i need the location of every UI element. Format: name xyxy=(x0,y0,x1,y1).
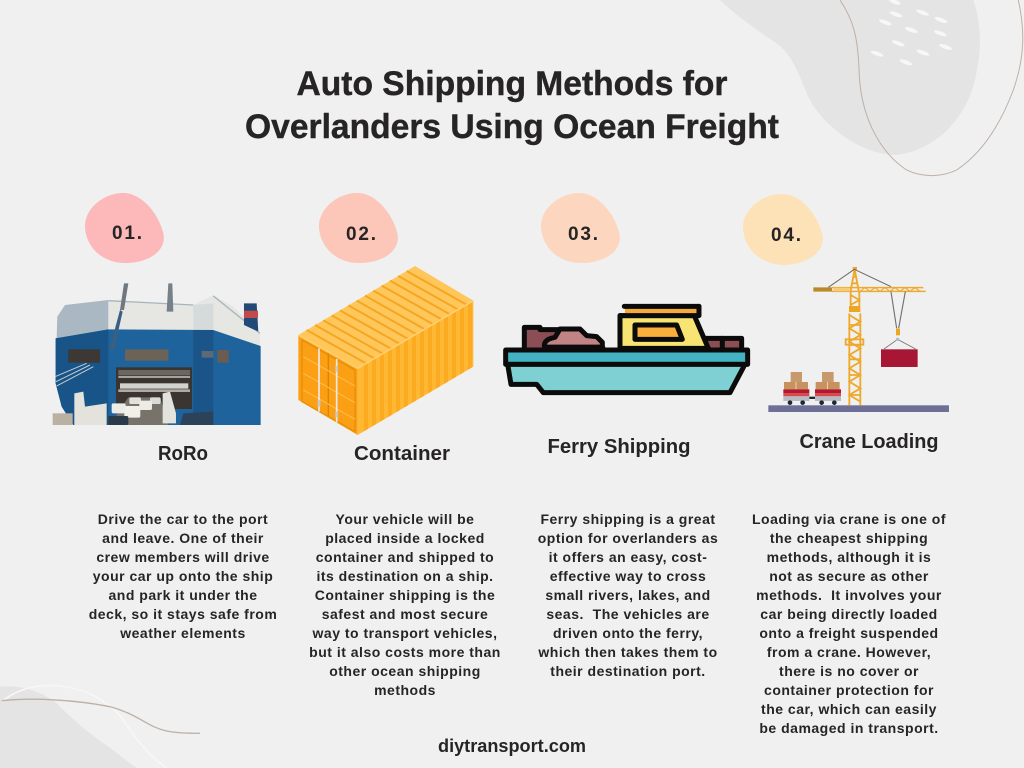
crane tower xyxy=(846,269,863,405)
number badge 01: 01. xyxy=(112,223,142,244)
ground xyxy=(768,405,949,412)
text block: Crane description: not as secure as other xyxy=(769,568,929,584)
number badge 04: 04. xyxy=(771,225,801,246)
title: Overlanders Using Ocean Freight xyxy=(245,108,779,146)
text block: Crane description: the car, which can easily xyxy=(761,701,937,717)
text block: Ferry description: it offers an easy, cost- xyxy=(549,549,707,565)
jib xyxy=(813,269,926,292)
text block: Ferry description: Ferry shipping is a great xyxy=(540,511,716,527)
decorative blob: bottom left xyxy=(0,686,200,768)
text block: RoRo description: deck, so it stays safe from xyxy=(89,606,277,622)
title: Auto Shipping Methods for xyxy=(296,65,728,103)
text block: Crane description: be damaged in transport. xyxy=(759,720,939,736)
text block: RoRo description xyxy=(89,511,277,641)
text block: Ferry description: effective way to cross xyxy=(550,568,706,584)
text block: Container description: but it also costs more than xyxy=(309,644,501,660)
heading: Crane Loading: Crane Loading xyxy=(800,431,938,453)
title xyxy=(245,65,779,146)
text block: RoRo description: and park it under the xyxy=(109,587,257,603)
text block: RoRo description: weather elements xyxy=(119,625,246,641)
text block: Container description: placed inside a locked xyxy=(325,530,485,546)
text block: Ferry description: which then takes them to xyxy=(537,644,718,660)
text block: Container description: other ocean shipping xyxy=(329,663,481,679)
heading: Container: Container xyxy=(354,443,450,465)
icon: ferry boat xyxy=(506,306,748,393)
icon: shipping container xyxy=(298,266,473,440)
text block: Container description: container and shipped to xyxy=(316,549,494,565)
text block: Container description: methods xyxy=(374,682,436,698)
text block: RoRo description: crew members will drive xyxy=(96,549,270,565)
footer source: diytransport.com xyxy=(438,736,586,756)
text block: Crane description xyxy=(752,511,946,736)
text block: RoRo description: Drive the car to the port xyxy=(98,511,268,527)
text block: Container description: its destination on a ship. xyxy=(316,568,494,584)
number badge 01 xyxy=(85,193,164,263)
text block: Crane description: car being directly loaded xyxy=(760,606,938,622)
wagons with boxes xyxy=(783,372,841,405)
ramp and car deck xyxy=(108,367,192,425)
text block: Ferry description: small rivers, lakes, and xyxy=(545,587,711,603)
decorative blob: top right xyxy=(720,0,1023,176)
icon: crane and freight wagons xyxy=(768,267,949,412)
text block: Crane description: onto a freight suspended xyxy=(759,625,939,641)
text block: RoRo description: your car up onto the ship xyxy=(93,568,273,584)
text block: Crane description: methods, although it is xyxy=(767,549,931,565)
text block: Container description: safest and most secure xyxy=(322,606,488,622)
text block: Container description: way to transport vehicles, xyxy=(312,625,497,641)
photo: RoRo ship xyxy=(53,283,261,425)
text block: Ferry description: seas. The vehicles are xyxy=(546,606,710,622)
text block: Crane description: there is no cover or xyxy=(779,663,919,679)
heading: RoRo: RoRo xyxy=(158,443,208,465)
text block: Ferry description: driven onto the ferry, xyxy=(553,625,703,641)
number badge 03: 03. xyxy=(568,224,598,245)
text block: Ferry description xyxy=(537,511,718,679)
text block: Crane description: container protection for xyxy=(764,682,934,698)
text block: Ferry description: their destination port. xyxy=(550,663,706,679)
text block: Container description: Container shipping is the xyxy=(315,587,495,603)
number badge 02 xyxy=(319,193,398,263)
heading: Ferry Shipping: Ferry Shipping xyxy=(548,436,690,458)
text block: Container description: Your vehicle will be xyxy=(336,511,474,527)
text block: Ferry description: option for overlanders as xyxy=(538,530,718,546)
number badge 04 xyxy=(743,194,823,265)
text block: RoRo description: and leave. One of their xyxy=(102,530,264,546)
text block: Crane description: methods. It involves your xyxy=(756,587,942,603)
hoist and suspended freight xyxy=(881,292,918,367)
number badge 03 xyxy=(541,193,620,263)
text block: Crane description: the cheapest shipping xyxy=(770,530,928,546)
text block: Crane description: from a crane. However, xyxy=(767,644,931,660)
text block: Crane description: Loading via crane is one of xyxy=(752,511,946,527)
text block: Container description xyxy=(309,511,501,698)
number badge 02: 02. xyxy=(346,224,376,245)
